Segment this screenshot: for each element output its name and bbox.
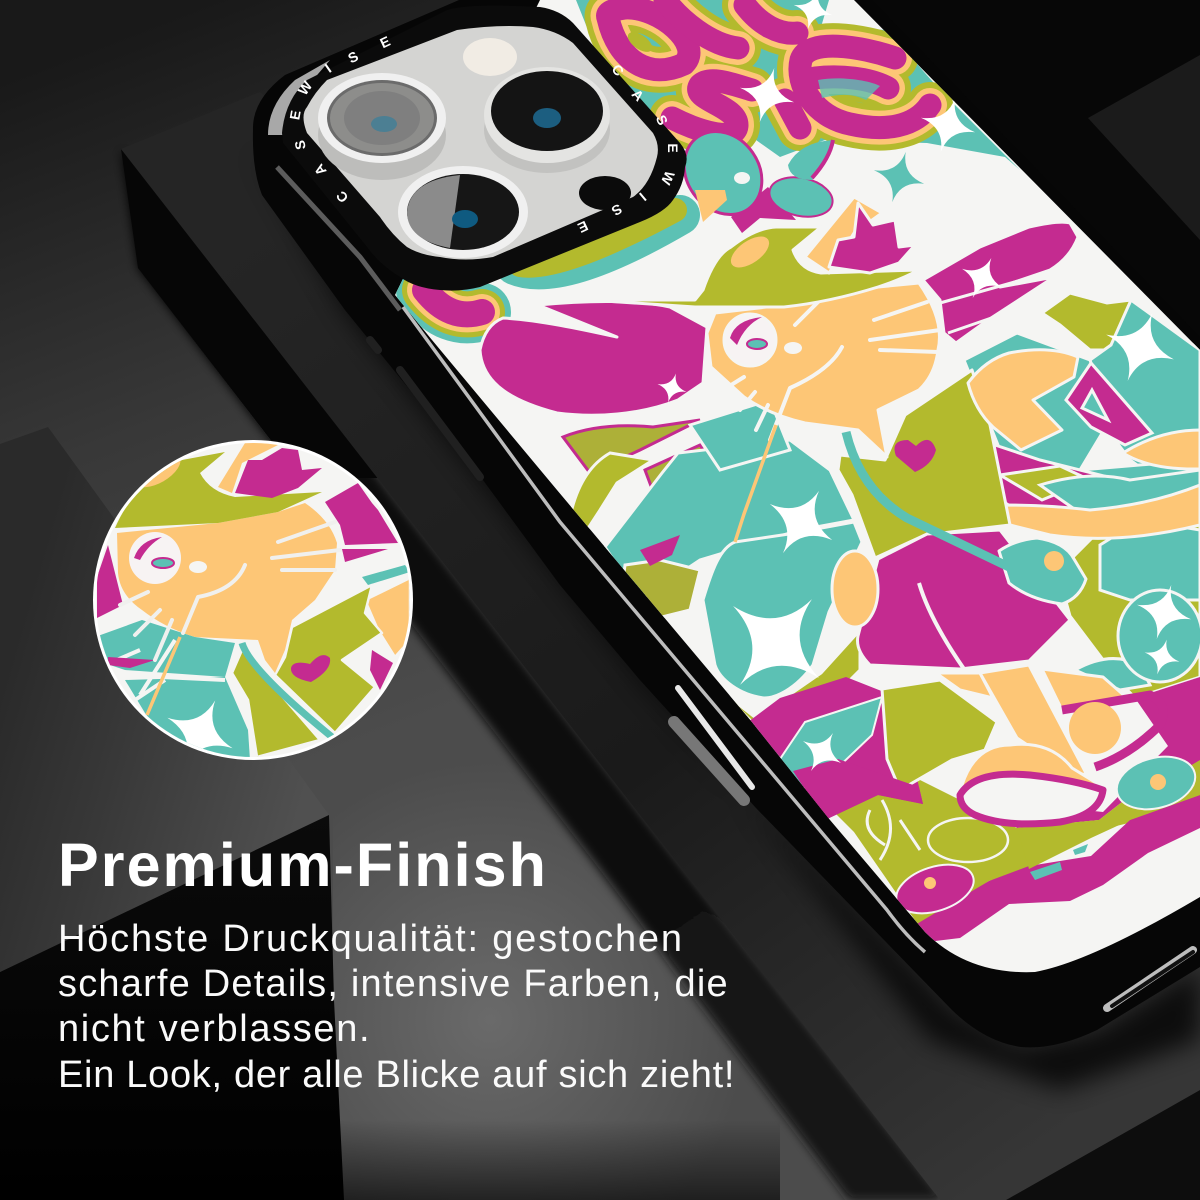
magnifier flower — [235, 448, 322, 498]
text block — [58, 831, 735, 1096]
background light glow — [333, 760, 833, 1200]
heart — [894, 440, 936, 472]
description: Höchste Druckqualität: gestochen — [58, 918, 684, 960]
nose — [784, 342, 802, 354]
magnifier teal leaves — [95, 620, 235, 677]
right wing — [923, 222, 1078, 343]
arm — [968, 350, 1078, 450]
description — [58, 918, 735, 1096]
magnifier heart — [291, 655, 330, 682]
description: nicht verblassen. — [58, 1008, 371, 1050]
magnifier sparkle — [152, 685, 248, 781]
brand ring lettering: W — [295, 77, 316, 98]
brand ring lettering: E — [286, 109, 304, 121]
side buttons — [370, 340, 480, 477]
inner silver rim — [403, 307, 925, 952]
bag — [999, 538, 1086, 604]
brand ring lettering: C — [609, 61, 627, 79]
shoe — [964, 743, 1095, 785]
hand — [832, 551, 878, 627]
magnifier left wing — [97, 545, 123, 618]
brand ring lettering: S — [345, 48, 361, 66]
parrot — [684, 133, 835, 233]
magnifier whiskers — [120, 522, 340, 660]
phone case body — [253, 0, 1200, 1047]
ground — [748, 677, 1200, 942]
brand ring lettering: S — [291, 139, 309, 151]
block: upper right — [860, 0, 1200, 350]
head — [707, 283, 939, 457]
flower — [829, 203, 915, 273]
lens bottom — [398, 166, 528, 258]
description: Ein Look, der alle Blicke auf sich zieht! — [58, 1054, 735, 1096]
brand ring lettering: I — [322, 60, 334, 76]
sparkles — [654, 0, 1198, 782]
magnifier jacket — [275, 585, 382, 733]
legs — [940, 674, 990, 696]
glass window — [304, 26, 658, 260]
magnifier white leaf veins — [105, 640, 225, 700]
magnifier stem — [147, 637, 180, 715]
phone shadow — [253, 150, 1200, 1090]
skirt — [858, 530, 1070, 669]
magnifier ear — [218, 443, 282, 493]
strap — [846, 432, 1009, 567]
brand ring lettering: A — [629, 86, 647, 104]
hat — [589, 227, 919, 307]
eye — [724, 314, 776, 366]
magnifier right wing — [325, 483, 398, 545]
lens top-left — [318, 73, 446, 180]
flash — [463, 38, 517, 76]
camera island — [268, 6, 687, 291]
sandal — [1062, 695, 1163, 767]
groovy lettering — [576, 0, 1020, 170]
magnifier circle — [90, 440, 420, 781]
microphone sensor — [579, 176, 631, 210]
block: lower left step — [0, 427, 780, 1200]
heading: Premium-Finish — [58, 831, 548, 899]
magnifier strap — [242, 643, 332, 737]
magnifier arm — [368, 579, 410, 655]
brand ring lettering: E — [575, 218, 591, 236]
brand ring lettering: I — [636, 190, 650, 204]
charging port — [1107, 950, 1193, 1008]
brand ring lettering: C — [333, 188, 351, 206]
magnifier eye — [129, 532, 181, 584]
magnifier nose — [189, 561, 207, 573]
brand ring lettering: W — [658, 169, 678, 188]
whisker stem — [735, 425, 776, 542]
lettering under camera — [425, 210, 680, 314]
magnifier hat — [115, 452, 322, 528]
brand ring lettering: E — [377, 33, 393, 51]
whiskers and mouth — [723, 300, 940, 440]
left wing — [480, 301, 707, 415]
brand ring lettering — [286, 33, 681, 236]
black ring — [282, 6, 687, 291]
brand ring lettering: E — [665, 143, 681, 153]
brand ring lettering: S — [609, 201, 625, 219]
tail — [1003, 485, 1200, 538]
jacket — [838, 370, 1010, 558]
back foliage — [563, 293, 1200, 730]
ear — [805, 197, 882, 273]
brand ring lettering: A — [311, 161, 329, 179]
magnifier head — [117, 503, 337, 673]
description: scharfe Details, intensive Farben, die — [58, 963, 729, 1005]
cat figure — [480, 197, 1200, 824]
brand ring lettering: S — [653, 112, 671, 128]
printed artwork — [395, 0, 1200, 972]
lens right — [484, 67, 610, 173]
grey reflection band — [268, 60, 330, 135]
